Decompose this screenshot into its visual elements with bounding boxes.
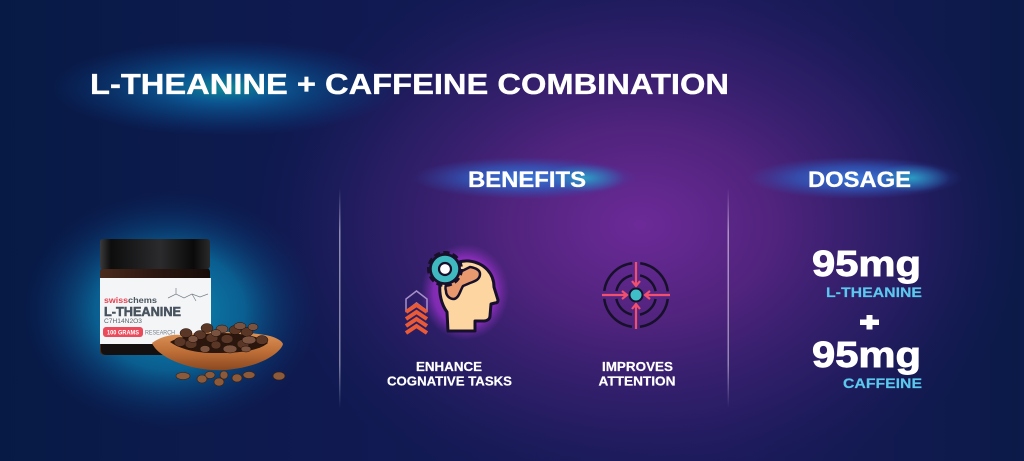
divider: left (339, 188, 340, 408)
label: enhance cognative tasks (387, 360, 512, 388)
heading glow (747, 157, 963, 199)
dose: l-theanine: 95mg (812, 243, 921, 284)
jar (100, 239, 211, 355)
icon: target (602, 262, 670, 329)
label: improves attention (598, 360, 676, 388)
wooden bowl (152, 332, 283, 370)
label: improves attention: ATTENTION (598, 374, 676, 388)
panel: product (100, 239, 285, 386)
dose: caffeine: 95mg (812, 334, 921, 375)
heading: BENEFITS (468, 167, 586, 192)
dose: l-theanine: L-THEANINE (826, 284, 922, 300)
divider: right (728, 188, 729, 408)
heading: DOSAGE (808, 167, 911, 192)
dose: caffeine: CAFFEINE (843, 375, 922, 391)
dose: caffeine (812, 334, 922, 391)
title: L-THEANINE + CAFFEINE COMBINATION (90, 69, 729, 101)
label: improves attention: IMPROVES (602, 360, 673, 374)
panel: dosage (747, 157, 963, 391)
scattered beans (176, 371, 285, 386)
jar label (103, 288, 208, 337)
coffee beans (174, 322, 268, 353)
plus sign (860, 315, 879, 330)
jar label: RESEARCH (145, 330, 175, 336)
jar label: swiss (104, 295, 128, 305)
jar label: L-THEANINE (104, 305, 181, 319)
icon: brain head with gear (421, 244, 509, 340)
jar label: 100 GRAMS (107, 330, 140, 336)
jar label: chems (128, 295, 157, 305)
icon: upward chevrons (406, 291, 427, 333)
heading glow (413, 157, 637, 199)
label: enhance cognative tasks: COGNATIVE TASKS (387, 374, 512, 388)
jar label: C7H14N2O3 (104, 319, 143, 325)
dose: l-theanine (812, 243, 922, 300)
panel: benefits (387, 157, 676, 388)
label: enhance cognative tasks: ENHANCE (416, 360, 482, 374)
